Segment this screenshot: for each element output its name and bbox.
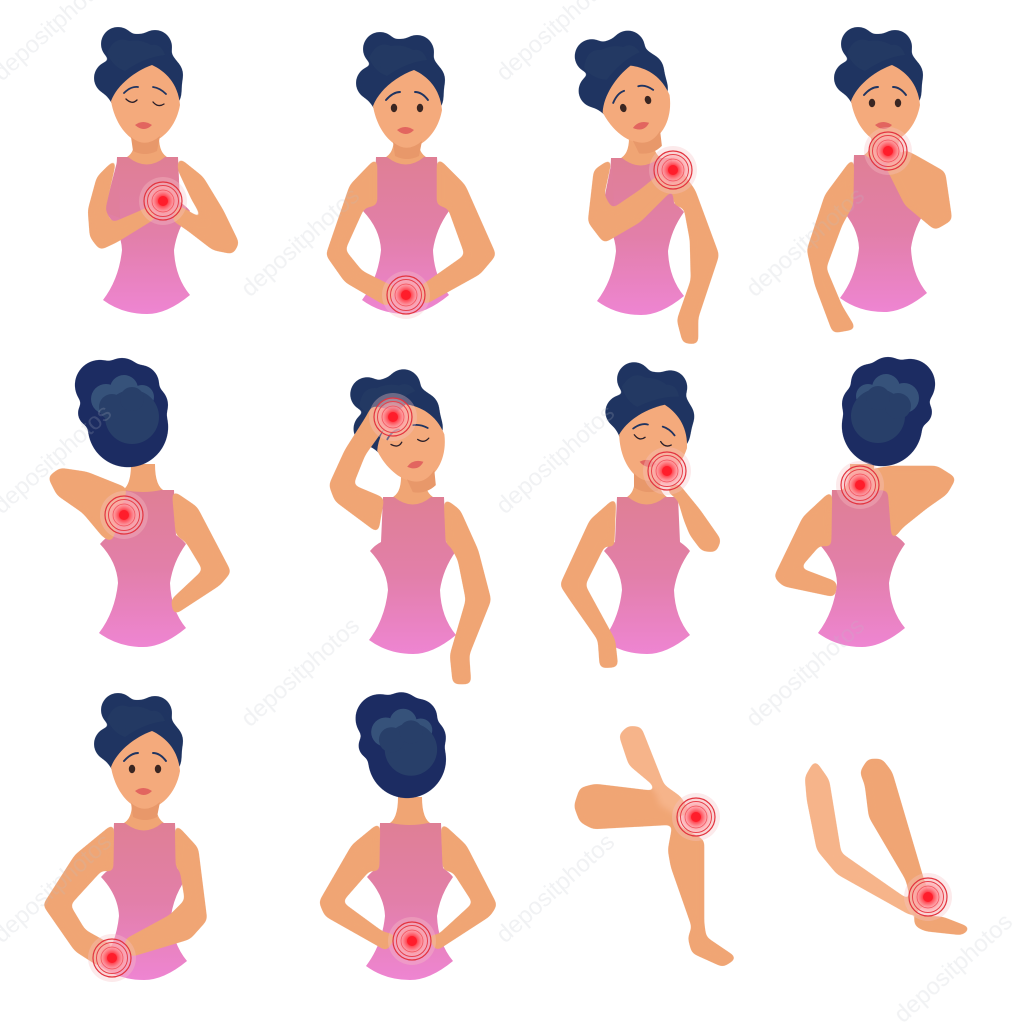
watermark text: depositphotos	[236, 612, 365, 732]
watermark text: depositphotos	[741, 612, 870, 732]
figure 1: chest pain	[88, 27, 239, 314]
watermark text: depositphotos	[741, 182, 870, 302]
leg 2: ankle pain	[805, 759, 971, 935]
figure 3: shoulder pain	[564, 20, 719, 344]
dress side fill	[604, 160, 614, 212]
figure 4: throat pain	[807, 27, 952, 333]
watermark text: depositphotos	[491, 828, 620, 948]
leg 1: knee pain	[574, 726, 737, 967]
figure 7: jaw pain	[560, 359, 721, 668]
figure 8: neck pain from behind	[774, 357, 956, 647]
figure 5: back of shoulder pain	[48, 358, 231, 647]
figure 10: lower back pain	[319, 692, 497, 980]
watermark text: depositphotos	[491, 399, 620, 519]
figure 9: wrist pain	[43, 693, 207, 982]
figure 6: headache	[329, 359, 491, 684]
dress bust fill	[104, 158, 120, 218]
watermark text: depositphotos	[236, 182, 365, 302]
figure 2: abdominal pain	[326, 32, 496, 319]
